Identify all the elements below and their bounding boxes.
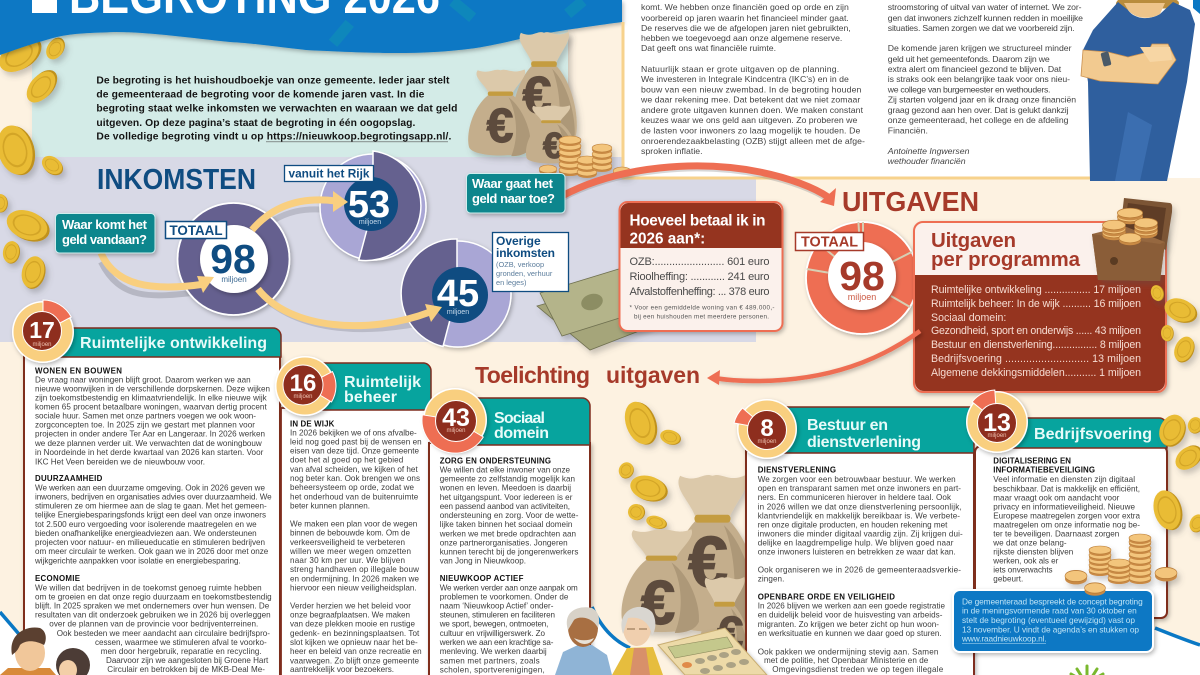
intro text: De begroting is het huishoudboekje van onze gemeente. Ieder jaar stelt — [96, 76, 450, 86]
illustration: man bottom left — [0, 627, 56, 675]
badge: 8 miljoen: miljoen — [757, 439, 777, 445]
letter column 1: komt. We hebben onze financiën goed op orde en zijn — [641, 2, 849, 12]
letter column 1: onroerendezaakbelasting (OZB) stijgt alleen met de afge- — [641, 136, 865, 146]
letter column 2: geld uit het gemeentefonds. Daarom zijn we — [888, 54, 1050, 64]
panel text: nog beter kan. Ook brengen we ons — [290, 474, 420, 483]
donut: overige inkomsten 45 — [401, 239, 511, 347]
panel text: maatregelen om onze informatie nog be- — [993, 520, 1140, 529]
callout: gemeenteraad info: www.raadnieuwkoop.nl. — [961, 633, 1047, 643]
panel text: zingen. — [758, 575, 784, 584]
label: TOTAAL income: TOTAAL — [170, 222, 223, 238]
programme list: Gezondheid, sport en onderwijs ...... 43 miljoen — [931, 325, 1141, 337]
illustration: coins right of programme panel — [1149, 284, 1200, 366]
panel text: in Noordeinde in het derde kwartaal van 2026 kan starten. Voor — [35, 448, 264, 457]
panel text: DIENSTVERLENING — [758, 466, 836, 475]
panel text: en ondermijning. In 2026 maken we — [290, 574, 419, 583]
label: Overige inkomsten: (OZB, verkoop — [496, 260, 544, 269]
panel text: ren onze digitale producten, en houden rekening met — [758, 520, 948, 529]
letter column 2: graag gezond aan hen over. Dat is gelukt dankzij — [888, 105, 1069, 115]
divider line panel 4/5 — [973, 618, 975, 675]
panel text: Ook besteden we meer aandacht aan circulaire bedrijfspro- — [57, 629, 270, 638]
panel: bestuur en dienstverlening — [746, 407, 974, 675]
panel text: gebeurt. — [993, 575, 1023, 584]
donut: total spending 98 — [806, 222, 918, 334]
panel text: ZORG EN ONDERSTEUNING — [440, 456, 551, 465]
illustration: alderwoman in blue dress — [1081, 0, 1195, 181]
letter column 1: keuzes waar we ons geld aan uitgeven. Zo proberen we — [641, 115, 857, 125]
icon: treasure chest with coins — [1092, 198, 1172, 281]
heading: INKOMSTEN: INKOMSTEN — [97, 164, 256, 196]
panel text: In 2026 bekijken we of ons afvalbe- — [290, 428, 417, 437]
heading: toelichting uitgaven — [475, 362, 700, 388]
letter column 1 — [640, 2, 865, 156]
panel text: doet het al goed op het gebied — [290, 456, 403, 465]
background: grey income panel — [0, 157, 756, 342]
badge: 13 miljoen: 13 — [983, 409, 1011, 437]
box: hoeveel betaal ik: Rioolheffing: ............ 241 euro — [630, 271, 770, 283]
panel: uitgaven per programma — [914, 222, 1166, 392]
letter column 2: Zij starten volgend jaar en ik draag onze financiën — [888, 94, 1076, 104]
panel text: migranten. Zo krijgen we beter zicht op hun woon- — [758, 620, 939, 629]
background: white lower right with blue line — [974, 620, 1200, 675]
panel text: we deze plannen verder uit. We verwachten dat de woningbouw — [34, 439, 262, 448]
box: hoeveel betaal ik: * Voor een gemiddelde woning van € 489.000,- — [630, 304, 774, 312]
donut: total income 98 — [178, 203, 290, 315]
panel text — [992, 457, 1140, 584]
letter column 2: Financiën. — [888, 126, 928, 136]
badge: 17 miljoen — [12, 300, 74, 363]
badge: 13 miljoen — [966, 390, 1028, 453]
panel text: stimuleren ze om hiermee aan de slag te gaan. Met het gemeen- — [35, 502, 267, 511]
panel text: komen 65 procent betaalbare woningen, waarvan dertig procent — [35, 403, 267, 412]
badge: 16 miljoen: miljoen — [293, 394, 313, 400]
panel text: We werken verder aan onze aanpak om — [440, 584, 578, 593]
programme list — [931, 284, 1141, 379]
donut: vanuit het Rijk 53: 53 — [348, 184, 390, 226]
panel text: van afval scheiden, we kijken of het — [290, 465, 418, 474]
panel text: NIEUWKOOP ACTIEF — [440, 574, 524, 583]
letter column 2: onze gemeenteraad, het college en de afdeling — [888, 115, 1069, 125]
background: white lower middle with blue line — [590, 605, 650, 675]
donut: total spending 98: miljoen — [848, 292, 876, 302]
panel text: men door hergebruik, reparatie en recycling. — [101, 647, 262, 656]
panel text: Circulair en betrokken bij de MKB-Deal Me- — [107, 665, 265, 674]
letter column 1: We investeren in Integrale Kindcentra (IKC’s) en in de — [641, 74, 849, 84]
panel title — [931, 229, 1081, 271]
letter column 2: wethouder financiën — [888, 156, 966, 166]
panel text: naar 30 km per uur. We blijven — [290, 556, 405, 565]
box: hoeveel betaal ik: Afvalstoffenheffing: ... 378 euro — [630, 286, 770, 298]
panel text: inwoners, bedrijven en organisaties advies over duurzaamheid. We — [35, 493, 272, 502]
badge: 17 miljoen: 17 — [29, 317, 55, 343]
badge: 17 miljoen: miljoen — [32, 342, 52, 348]
panel text — [34, 366, 272, 674]
panel text: Europese maatregelen zorgen voor extra — [993, 511, 1140, 520]
label: Overige inkomsten: gronden, verhuur — [496, 269, 553, 278]
callout: gemeenteraad info: stelt de begroting (eventueel gewijzigd) vast op — [962, 615, 1135, 625]
panel text: aantrekkelijk voor bezoekers. — [290, 665, 394, 674]
badge: 8 miljoen: 8 — [760, 415, 774, 442]
panel header title: Ruimtelijke ontwikkeling — [80, 335, 267, 352]
panel text: werken we aan een krachtige sa- — [439, 638, 554, 647]
programme list: Bedrijfsvoering ............................ 13 miljoen — [931, 353, 1141, 365]
panel header title — [494, 410, 549, 442]
panel text: streng handhaven op illegale bouw — [290, 565, 419, 574]
panel text: IN DE WIJK — [290, 420, 335, 429]
panel text: ECONOMIE — [35, 574, 80, 583]
badge: 43 miljoen: miljoen — [446, 428, 466, 434]
illustration: money bags bottom: € — [717, 608, 743, 661]
letter column 1: we daar rekening mee. Dat betekent dat we niet zomaar — [640, 94, 860, 104]
intro text: De volledige begroting vindt u op https://nieuwkoop.begrotingsapp.nl/. — [96, 132, 452, 142]
arrows: income flow shadows — [101, 209, 436, 329]
callout: waar gaat het geld naar toe: Waar gaat het — [472, 176, 554, 191]
label: Overige inkomsten — [492, 232, 568, 292]
panel text: De vraag naar woningen blijft groot. Daarom werken we aan — [35, 376, 251, 385]
programme list: Ruimtelijk beheer: In de wijk .......... 16 miljoen — [931, 298, 1141, 310]
heading: toelichting uitgaven: uitgaven — [606, 362, 700, 388]
panel text: resultaten van dit onderzoek gebruiken we in 2026 bij overleggen — [35, 611, 271, 620]
panel text: ter te beveiligen. Daarnaast zorgen — [993, 529, 1119, 538]
panel header title: Bedrijfsvoering — [1034, 426, 1152, 443]
panel text: We maken een plan voor de wegen — [290, 520, 417, 529]
panel text: het onderhoud van de buitenruimte — [290, 492, 419, 501]
background: white letter area top right — [622, 0, 1200, 178]
panel text: lijke taken binnen het sociaal domein — [440, 520, 572, 529]
letter column 1: de lasten voor inwoners zo laag mogelijk te houden. De — [641, 126, 860, 136]
letter column 2: is straks ook een belangrijke taak voor ons nieu- — [888, 74, 1070, 84]
panel header title — [344, 374, 421, 406]
panel text: projecten voor natuur- en milieueducatie en stimuleren bedrijven — [35, 538, 265, 547]
decorative banknote shapes — [329, 0, 587, 47]
panel text: heer en beleid van onze recreatie en — [290, 647, 422, 656]
donut: vanuit het Rijk 53: miljoen — [359, 219, 381, 226]
callout: waar gaat het geld naar toe: geld naar toe? — [472, 191, 555, 206]
letter column 1: Natuurlijk staan er grote uitgaven op de planning. — [641, 64, 839, 74]
panel text: Daarvoor zijn we aangesloten bij Groene Hart — [106, 656, 269, 665]
callout: waar gaat het geld naar toe — [466, 174, 565, 213]
panel text: blijft. In 2025 spraken we met ondernemers over hun wensen. De — [35, 602, 270, 611]
illustration: coins centre — [616, 397, 683, 531]
panel text: problemen te voorkomen. Onder de — [440, 593, 569, 602]
box: hoeveel betaal ik: bij een huishouden met meerdere personen. — [634, 314, 769, 320]
panel text: privacy en informatieveiligheid. Nieuwe — [993, 502, 1135, 511]
letter column 2: Antoinette Ingwersen — [887, 146, 970, 156]
panel text: nieuwe woonwijken in de verschillende dorpskernen. Deze wijken — [35, 385, 270, 394]
panel text: DIGITALISERING EN — [993, 457, 1071, 466]
letter column 2: gen dat inwoners zichzelf kunnen redden in moeilijke — [888, 13, 1083, 23]
panel text: om meer circulair te werken. Ook gaan we in 2026 door met onze — [35, 547, 269, 556]
panel: sociaal domein — [429, 398, 590, 675]
callout: waar komt het geld vandaan: geld vandaan? — [62, 232, 147, 247]
letter column 1: voorbereid op jaren waarin het financieel minder gaat. — [641, 13, 849, 23]
intro text: uitgeven. Op deze pagina’s staat de begroting in één oogopslag. — [96, 118, 416, 129]
panel text: WONEN EN BOUWEN — [35, 366, 122, 375]
panel text: beschikbaar. Dat is makkelijk en efficiënt, — [993, 484, 1140, 493]
panel text: over de plannen van de provincie voor bedrijventerreinen. — [49, 620, 258, 629]
panel text: ondersteuning en zorg. Voor de wette- — [440, 511, 579, 520]
illustration: calculator — [658, 628, 767, 675]
illustration: coin stacks in bedrijfsvoering — [1065, 534, 1177, 584]
panel text: cultuur en vrijwilligerswerk. Zo — [440, 629, 545, 638]
badge: 8 miljoen — [734, 399, 797, 459]
panel text: Veel informatie en diensten zijn digitaal — [993, 475, 1135, 484]
panel header — [56, 328, 281, 357]
panel text: werken we met brede opdrachten aan — [439, 529, 576, 538]
panel text: Ook pakken we ondermijning stevig aan. Samen — [758, 647, 938, 656]
illustration: money bags bottom — [621, 474, 758, 675]
panel text: vaarwegen. Zo blijft onze gemeente — [290, 656, 419, 665]
callout: waar komt het geld vandaan: Waar komt het — [62, 217, 148, 232]
illustration: older woman — [612, 607, 663, 675]
panel text: wonen en leven. Meedoen is daarbij — [439, 484, 571, 493]
panel text: naam ‘Nieuwkoop Actief’ onder- — [440, 602, 554, 611]
panel text: scholen, sportverenigingen, — [440, 666, 545, 675]
label: Overige inkomsten: Overige — [496, 234, 541, 248]
panel text: We willen dat bedrijven in de toekomst genoeg ruimte hebben — [35, 583, 262, 592]
illustration: woman bottom left — [56, 648, 90, 675]
letter column border — [623, 22, 1100, 178]
illustration: coins left edge — [0, 29, 68, 291]
panel text: bieden onafhankelijke energieadviezen aan. We ondersteunen — [35, 529, 257, 538]
badge: 43 miljoen — [422, 388, 487, 453]
callout: gemeenteraad info: in de meningsvormende raad van 30 oktober en — [962, 605, 1137, 615]
panel text: gemeente zo zelfstandig mogelijk kan — [440, 475, 575, 484]
panel header — [300, 363, 431, 410]
panel text: cessen, waarmee we stimuleren afval te voorko- — [95, 638, 267, 647]
panel: bedrijfsvoering — [975, 418, 1167, 618]
panel header title: dienstverlening — [807, 434, 921, 451]
arrow: red curve to UITGAVEN — [562, 166, 836, 206]
panel header — [465, 398, 590, 445]
panel text: van deze plekken mooie en rustige — [290, 620, 415, 629]
letter column 1: andere grote uitgaven kunnen doen. We maken constant — [641, 105, 864, 115]
illustration: money bags bottom: € — [641, 569, 675, 638]
panel text: in 2026 willen we dat onze dienstverlening persoonlijk, — [758, 502, 962, 511]
panel text: beheersysteem op orde, zodat we — [290, 483, 414, 492]
badge: 16 miljoen — [275, 356, 336, 416]
panel text: en werksituatie en kunnen we daar goed op sturen. — [758, 629, 942, 638]
panel text: Ook organiseren we in 2026 de gemeenteraadsverkie- — [758, 566, 961, 575]
donut: vanuit het Rijk 53 — [320, 151, 426, 261]
panel text: ners. En communiceren hierover in heldere taal. Ook — [758, 493, 952, 502]
panel text: onze begraafplaatsen. We maken — [290, 611, 410, 620]
programme list: Sociaal domein: — [931, 312, 1006, 324]
illustration: money bags top: € — [523, 67, 551, 125]
panel text: beter kunnen plannen. — [290, 502, 370, 511]
label: Overige inkomsten: inkomsten — [496, 246, 555, 260]
panel text: en duidelijk beleid voor de huisvesting van arbeids- — [758, 611, 943, 620]
panel text — [289, 420, 422, 674]
arrow: yellow flow to Rijk — [252, 191, 348, 230]
badge: 16 miljoen: 16 — [290, 370, 316, 397]
callout: gemeenteraad info: De gemeenteraad bespreekt de concept begroting — [962, 596, 1143, 606]
panel text: rijkste diensten blijven — [993, 547, 1073, 556]
panel text: van Jong in Nieuwkoop. — [440, 557, 526, 566]
panel text: maar vraagt ook om aandacht voor — [993, 493, 1120, 502]
box: hoeveel betaal ik: 2026 aan*: — [630, 230, 705, 248]
panel header — [1000, 418, 1167, 448]
letter column 2 — [887, 2, 1083, 166]
callout: waar komt het geld vandaan — [56, 214, 155, 253]
donut: overige inkomsten 45: miljoen — [447, 309, 469, 316]
panel text: zijn toekomstbestendig en klimaatvriendelijk. In elke nieuwe wijk — [35, 394, 268, 403]
illustration: money bags top: € — [543, 125, 563, 166]
donut: total spending 98: 98 — [839, 253, 885, 299]
panel text: onze inwoners luisteren en betrekken ze waar dat kan. — [758, 548, 956, 557]
panel text: We willen dat elke inwoner van onze — [440, 466, 570, 475]
panel text: onze partnerorganisaties. Jongeren — [440, 538, 568, 547]
intro text: begroting staat welke inkomsten we verwachten en waaraan we dat geld — [96, 104, 457, 114]
panel text: tot 2.500 euro vergoeding voor isolerende maatregelen en we — [35, 520, 257, 529]
arrow: yellow flow to overige — [258, 289, 442, 326]
letter column 1: De reserves die we de afgelopen jaren niet gebruikten, — [641, 23, 851, 33]
arrow: red curve to toelichting — [707, 331, 920, 385]
panel text: verkeersveiligheid te verbeteren — [290, 538, 405, 547]
panel text: INFORMATIEBEVEILIGING — [993, 466, 1095, 475]
panel text: delijke en laagdrempelige hulp. We blijven goed naar — [758, 539, 954, 548]
panel text: om te groeien en dat onze regio duurzaam en toekomstbestendig — [35, 592, 272, 601]
panel text: telijke Energiebesparingsfonds krijgt een deel van onze inwoners — [35, 511, 266, 520]
panel text: open en transparant samen met onze inwoners en part- — [758, 484, 961, 493]
panel text: we sport, bewegen, ontmoeten, — [439, 620, 548, 629]
panel text: een passend aanbod van activiteiten, — [440, 502, 570, 511]
letter column 1: sproken inflatie. — [641, 146, 703, 156]
label: vanuit het Rijk: vanuit het Rijk — [288, 168, 370, 180]
illustration: money bags bottom: € — [688, 523, 728, 603]
panel text: samen met partners, zoals — [440, 656, 540, 665]
panel text: kunnen terecht bij de jongerenwerkers — [440, 547, 578, 556]
box: hoeveel betaal ik: Hoeveel betaal ik in — [630, 212, 766, 230]
panel text: steunen, stimuleren en faciliteren — [440, 611, 555, 620]
panel text: In 2026 blijven we werken aan een goede registratie — [758, 602, 945, 611]
letter column 2: extra alert om financieel gezond te blijven. Dat — [888, 64, 1062, 74]
illustration: money bags top: € — [487, 100, 513, 153]
background: mint intro panel — [32, 30, 568, 157]
panel header title: domein — [494, 425, 549, 442]
panel text: We werken aan een duurzame omgeving. Ook in 2026 geven we — [35, 484, 265, 493]
box: hoeveel betaal ik — [620, 202, 782, 331]
letter column 2: situaties. Samen zorgen we dat we voorbereid zijn. — [888, 23, 1075, 33]
panel text — [758, 466, 963, 674]
panel text: eisen van deze tijd. Onze gemeente — [290, 447, 419, 456]
intro text: de gemeenteraad de begroting voor de komende jaren vast. In die — [96, 90, 425, 100]
panel title: per programma — [931, 248, 1081, 271]
heading: toelichting uitgaven: Toelichting — [475, 362, 590, 388]
panel: ruimtelijk beheer — [281, 363, 431, 675]
panel text: willen we meer wegen omzetten — [289, 547, 411, 556]
panel text: gedenk- en bezinningsplaatsen. Tot — [290, 629, 420, 638]
panel header title: Sociaal — [494, 410, 545, 427]
panel text: inwoners die minder digitaal vaardig zijn. Zij krijgen dui- — [758, 530, 963, 539]
illustration: older man — [555, 607, 612, 675]
panel text: iets onverwachts — [993, 566, 1053, 575]
callout: gemeenteraad info — [953, 590, 1153, 652]
donut: overige inkomsten 45: 45 — [437, 273, 479, 315]
panel text: we dat onze belang- — [992, 538, 1067, 547]
donut: total income 98: 98 — [210, 236, 256, 282]
letter column 1: Dat geeft ons wat financiële ruimte. — [641, 43, 776, 53]
panel header title — [807, 417, 921, 451]
badge: 13 miljoen: miljoen — [987, 433, 1007, 439]
box: hoeveel betaal ik: OZB:........................ 601 euro — [630, 256, 770, 268]
programme list: Ruimtelijke ontwikkeling ................ 17 miljoen — [931, 284, 1141, 296]
panel text — [439, 456, 579, 675]
letter column 1: hebben we toegevoegd aan onze algemene reserve. — [641, 33, 842, 43]
panel text: OPENBARE ORDE EN VEILIGHEID — [758, 592, 895, 601]
panel header title: Ruimtelijk — [344, 374, 421, 391]
panel header title: beheer — [344, 389, 397, 406]
illustration: money bags top — [468, 32, 631, 178]
panel text: sociale huur. Samen met onze partners voegen we ook woon- — [35, 412, 256, 421]
panel text: klantvriendelijk en makkelijk bereikbaar is. We verbete- — [758, 511, 960, 520]
programme list: Bestuur en dienstverlening................ 8 miljoen — [931, 339, 1141, 351]
panel text: projecten in onder andere Ter Aar en Langeraar. In 2026 werken — [35, 430, 265, 439]
panel text: met de politie, het Openbaar Ministerie en de — [764, 656, 929, 665]
label: Overige inkomsten: en leges) — [496, 278, 526, 287]
letter column 2: stroomstoring of uitval van water of internet. We zor- — [888, 2, 1082, 12]
header wave band — [0, 0, 1200, 55]
panel text: Verder herzien we het beleid voor — [290, 602, 411, 611]
panel header title: Bestuur en — [807, 417, 888, 434]
badge: 43 miljoen: 43 — [442, 404, 470, 432]
icon: green logo rays — [1071, 666, 1103, 675]
panel text: binnen de bebouwde kom. Om de — [290, 529, 410, 538]
label: vanuit het Rijk — [284, 166, 374, 182]
panel text: IKC Het Veen bereiden we de nieuwbouw voor. — [35, 457, 205, 466]
intro text — [96, 76, 457, 142]
panel text: We zorgen voor een betrouwbaar bestuur. We werken — [758, 475, 956, 484]
panel text: zorgconcepten toe. In 2025 zijn we gestart met plannen voor — [35, 421, 255, 430]
callout: gemeenteraad info: 13 november. U vindt de agenda’s en stukken op — [962, 624, 1139, 634]
programme list: Algemene dekkingsmiddelen........... 1 miljoen — [931, 367, 1141, 379]
panel text: Omgevingsdienst treden we op tegen illegale — [772, 665, 944, 674]
donut: total income 98: miljoen — [221, 275, 247, 284]
panel text: leid nog goed past bij de wensen en — [290, 438, 422, 447]
panel: ruimtelijke ontwikkeling — [24, 328, 281, 675]
panel text: DUURZAAMHEID — [35, 474, 103, 483]
letter column 1: bouw van een nieuw zwembad. In de begroting houden — [641, 84, 862, 94]
panel text: menleving. We werken daarbij — [440, 647, 547, 656]
panel title: Uitgaven — [931, 229, 1016, 252]
background: white lower left corner with blue line — [0, 612, 24, 675]
letter column 2: De komende jaren krijgen we structureel minder — [888, 43, 1072, 53]
panel text: het uitgangspunt. Voor iedereen is er — [440, 493, 573, 502]
panel header — [770, 407, 974, 453]
heading: UITGAVEN: UITGAVEN — [842, 186, 979, 217]
panel text: hiervoor een nieuw veiligheidsplan. — [290, 583, 417, 592]
illustration: banknotes — [537, 268, 652, 350]
loose coin on info box — [1085, 583, 1105, 596]
panel text: wijkgerichte aanpakken voor isolatie en energiebesparing. — [34, 556, 241, 565]
arrow: yellow flow into total — [101, 253, 214, 293]
illustration: coins far right — [1149, 410, 1200, 535]
panel text: slot kijken we opnieuw naar het be- — [290, 638, 418, 647]
panel text: werken, ook als er — [992, 557, 1059, 566]
letter column 2: we college van burgemeester en wethouders. — [887, 84, 1050, 94]
label: TOTAAL spending: TOTAAL — [801, 234, 858, 250]
